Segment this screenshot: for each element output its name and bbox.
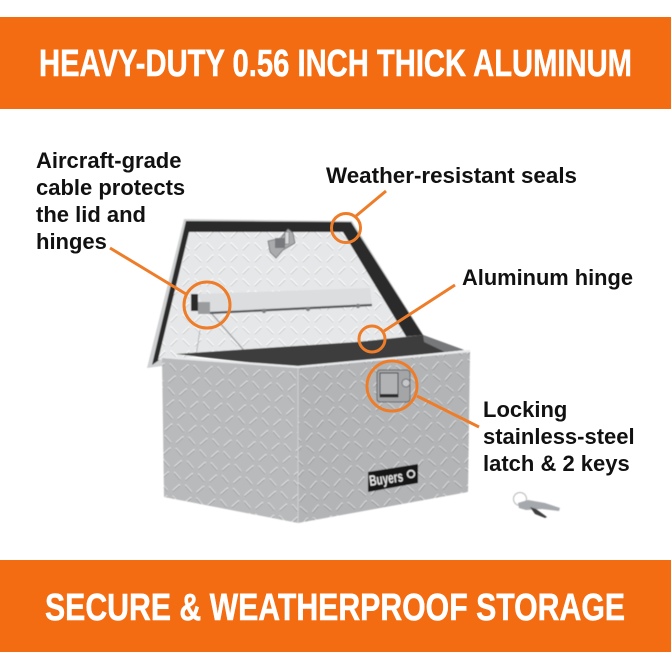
open lid [147, 219, 424, 368]
box interior [176, 335, 464, 368]
Buyers logo plate: Buyers [368, 468, 404, 490]
box rim highlight [162, 351, 470, 367]
callout: weather-resistant seals [326, 163, 577, 242]
stainless latch [377, 370, 410, 402]
box right face [298, 352, 470, 523]
icon: keys [514, 492, 560, 518]
leader line and ring: hinge [359, 285, 455, 352]
callout text: latch: Locking [483, 397, 567, 422]
cable and bracket [191, 294, 255, 363]
bottom banner [0, 560, 671, 652]
callout text: latch: stainless-steel [483, 424, 635, 449]
top banner [0, 17, 671, 109]
product: open aluminum toolbox [147, 219, 470, 523]
leader line and ring: cable [110, 248, 230, 328]
callout text: seals: Weather-resistant seals [326, 163, 577, 188]
callout: aircraft-grade cable [36, 148, 230, 328]
lid latch striker [268, 229, 295, 258]
callout text: cable: Aircraft-grade [36, 148, 181, 173]
box left face [162, 357, 298, 523]
callout text: cable: the lid and [36, 202, 146, 227]
callout text: cable: hinges [36, 229, 107, 254]
callout text: hinge: Aluminum hinge [462, 265, 633, 290]
callout text: latch: latch & 2 keys [483, 451, 630, 476]
callout: locking latch [367, 361, 641, 476]
callout text: cable: cable protects [36, 175, 185, 200]
leader line and ring: latch [367, 361, 479, 427]
leader line and ring: seals [332, 191, 386, 242]
lid support rail [198, 288, 372, 313]
callout: aluminum hinge [359, 265, 633, 352]
